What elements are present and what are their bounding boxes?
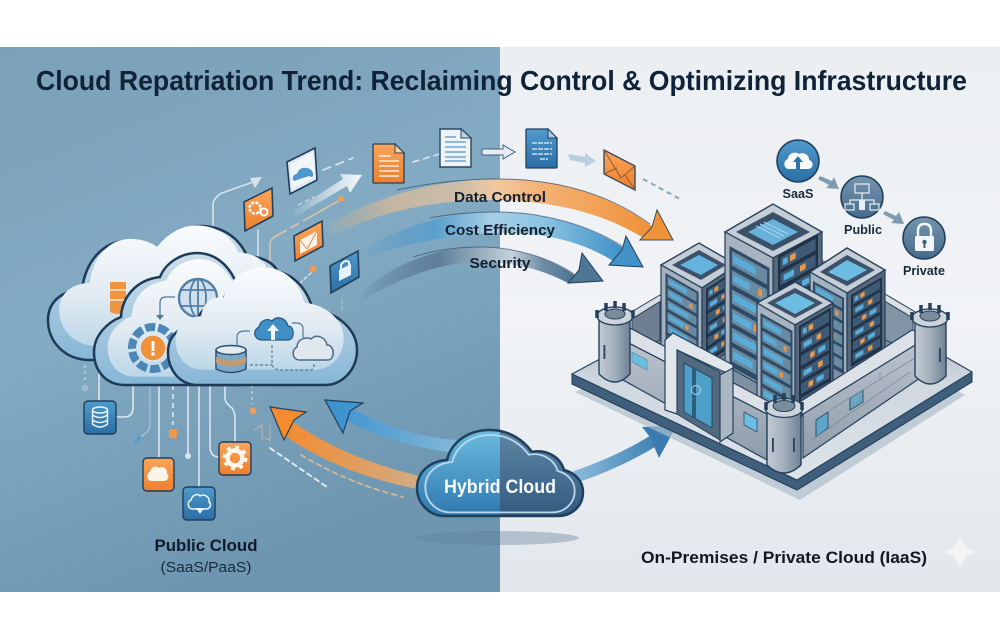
label: private: Private	[903, 263, 945, 278]
hybrid cloud	[417, 430, 583, 516]
arrow: white data arrow	[290, 174, 362, 216]
arrow: security	[363, 247, 603, 300]
dashed return lines	[254, 425, 403, 497]
arrow: blue return from hybrid cloud	[325, 400, 458, 453]
cloud: middle	[94, 253, 247, 385]
orange dots	[310, 196, 344, 272]
castle tower: front	[765, 393, 803, 473]
arrow: small white connector head	[250, 177, 262, 188]
courtyard and back walls	[628, 232, 917, 425]
arrow: orange return from hybrid cloud	[270, 407, 424, 490]
fortified data center	[572, 204, 972, 500]
cloud: back	[48, 225, 277, 360]
icon: orange envelope tile	[294, 221, 323, 261]
caption: saas/paas: (SaaS/PaaS)	[160, 560, 252, 576]
castle tower: left	[597, 301, 633, 382]
icon: orange envelope	[604, 150, 635, 190]
hybrid cloud shadow	[415, 531, 579, 545]
arrow: hybrid to on-premises	[575, 425, 677, 477]
icon: blue database tile	[84, 401, 116, 434]
icon: cloud document	[287, 148, 317, 194]
title: Cloud Repatriation Trend: Reclaiming Control & Optimizing Infrastructure	[36, 65, 967, 96]
icon: database in cloud	[216, 346, 246, 372]
lines below public cloud	[85, 360, 252, 488]
icon: orange gear tile	[219, 442, 251, 475]
clouds: public cloud group	[48, 225, 357, 385]
label: public: Public	[844, 222, 882, 237]
icon: grey cloud	[293, 336, 333, 360]
icon: blue cloud tile	[183, 487, 215, 520]
cloud flow lines	[237, 323, 314, 370]
platform base	[572, 262, 972, 490]
arrow: data control	[330, 179, 673, 240]
cloud: front	[168, 267, 357, 385]
label: hybrid cloud: Hybrid Cloud	[444, 477, 556, 498]
wall: front-left	[623, 328, 775, 460]
icon: sparkle watermark	[943, 535, 977, 569]
gatehouse	[665, 333, 733, 442]
server tower: front	[757, 282, 833, 420]
dashed line from envelope	[643, 179, 680, 199]
icon: blue lock tile	[330, 251, 359, 293]
icon: saas circle	[777, 140, 819, 182]
icon: blue upload cloud	[255, 318, 293, 340]
label: saas: SaaS	[782, 186, 814, 201]
platform shadow	[575, 300, 965, 500]
server tower: right	[810, 248, 885, 375]
icon: private circle	[903, 217, 945, 259]
arrow: hollow document arrow	[482, 145, 515, 159]
server tower: center tall	[725, 204, 822, 392]
icon: orange gear tile	[244, 188, 273, 231]
label: cost efficiency: Cost Efficiency	[445, 223, 555, 239]
castle tower: right	[912, 303, 948, 384]
icon: white document	[440, 129, 471, 167]
label: data control: Data Control	[454, 190, 546, 206]
legend: service levels	[777, 140, 945, 278]
icon: orange document	[373, 144, 404, 183]
icon: orange cloud tile	[143, 458, 174, 491]
arrow: public to private	[883, 211, 904, 224]
arrow: pale arrow to envelope	[568, 153, 596, 167]
arrow: cost efficiency	[367, 212, 643, 267]
panel: on-premises side background	[500, 47, 1000, 592]
connectors above the public cloud	[213, 152, 446, 310]
caption: public cloud: Public Cloud	[154, 536, 258, 555]
panel: public cloud side background	[0, 47, 500, 592]
server tower: left	[661, 243, 737, 370]
icon: public circle	[841, 176, 883, 218]
icon: blue document	[526, 129, 557, 168]
caption: on-premises: On-Premises / Private Cloud (IaaS)	[641, 548, 927, 567]
wall: front-right	[795, 330, 920, 458]
arrow: saas to public	[818, 176, 839, 189]
connector end dots	[82, 384, 256, 459]
label: security: Security	[470, 256, 530, 272]
